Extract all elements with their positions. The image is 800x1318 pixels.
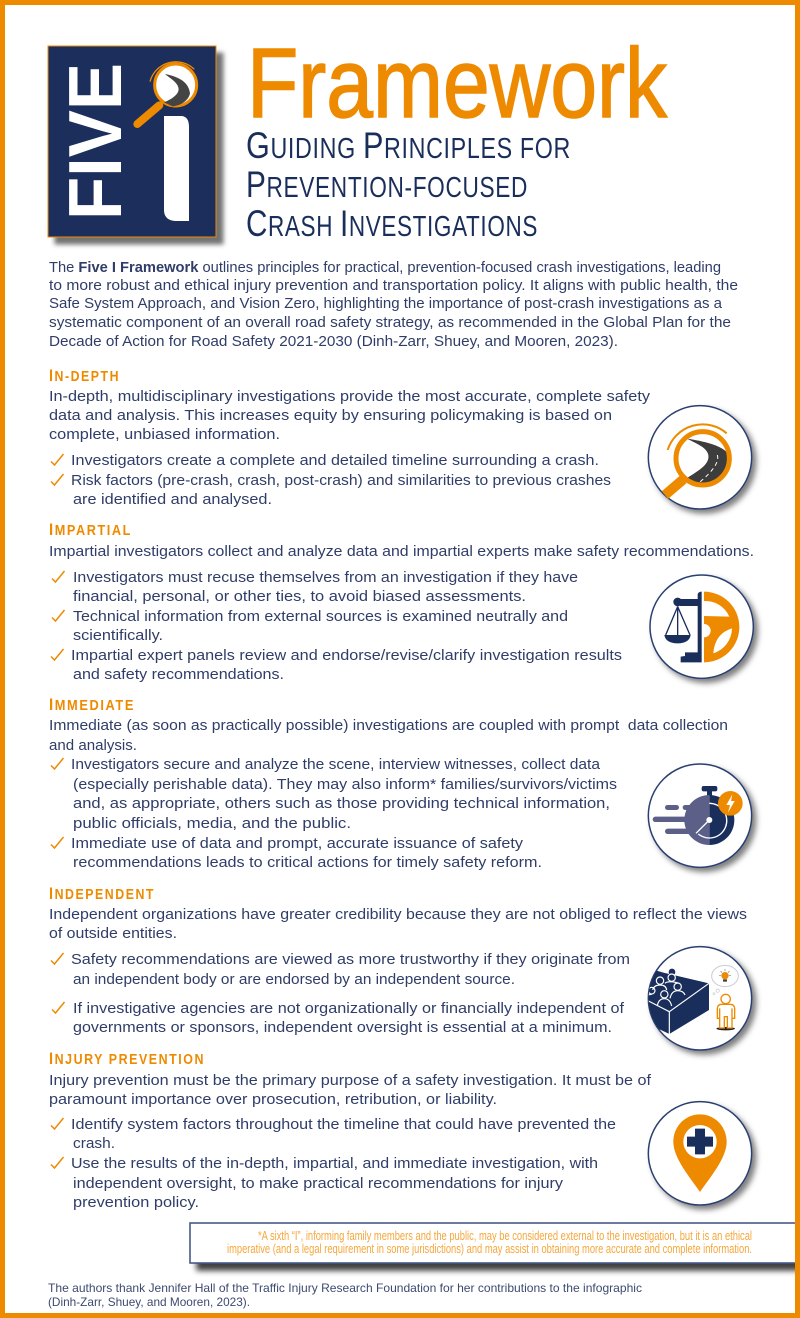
Independent description <box>49 907 747 942</box>
Impartial checklist: and safety recommendations. <box>73 667 284 683</box>
Immediate checklist <box>51 757 617 871</box>
Injury prevention checklist: Use the results of the in-depth, impartial, and immediate investigation, with <box>71 1156 598 1172</box>
Impartial checklist: Impartial expert panels review and endorse/revise/clarify investigation results <box>71 648 622 664</box>
intro text: to more robust and ethical injury prevention and transportation policy. It aligns with public health, the <box>49 278 738 294</box>
intro text: Safe System Approach, and Vision Zero, highlighting the importance of post-crash investigations as a <box>49 296 723 312</box>
icon: stopwatch with lightning bolt <box>648 764 752 867</box>
subtitle: CRASH INVESTIGATIONS <box>246 202 538 244</box>
intro text <box>49 260 738 350</box>
logo word FIVE: FIVE <box>53 63 137 220</box>
heading: Injury prevention: INJURY PREVENTION <box>49 1049 205 1068</box>
acknowledgements: The authors thank Jennifer Hall of the Traffic Injury Research Foundation for her contributions to the infographic <box>48 1281 642 1295</box>
Independent checklist: governments or sponsors, independent oversight is essential at a minimum. <box>73 1020 612 1036</box>
In-depth checklist: Risk factors (pre-crash, crash, post-crash) and similarities to previous crashes <box>71 473 611 489</box>
subtitle: GUIDING PRINCIPLES FOR <box>246 124 571 166</box>
Independent checklist: an independent body or are endorsed by an independent source. <box>73 972 515 988</box>
Independent checklist: If investigative agencies are not organizationally or financially independent of <box>73 1001 625 1017</box>
Immediate checklist: (especially perishable data). They may also inform* families/survivors/victims <box>73 777 617 793</box>
Impartial checklist: scientifically. <box>73 628 163 644</box>
Injury prevention description: paramount importance over prosecution, retribution, or liability. <box>49 1092 497 1108</box>
Injury prevention checklist: crash. <box>73 1136 115 1152</box>
logo magnifying glass <box>137 62 197 124</box>
icon: scales and steering wheel <box>650 575 753 678</box>
intro text: Decade of Action for Road Safety 2021-2030 (Dinh-Zarr, Shuey, and Mooren, 2023). <box>49 334 618 350</box>
Impartial description: Impartial investigators collect and analyze data and impartial experts make safety recommendations. <box>49 544 754 560</box>
Immediate checklist: recommendations leads to critical actions for timely safety reform. <box>73 855 542 871</box>
icon: location pin with medical cross <box>648 1102 752 1205</box>
Immediate checklist: Investigators secure and analyze the scene, interview witnesses, collect data <box>71 757 601 773</box>
Impartial checklist: Investigators must recuse themselves from an investigation if they have <box>73 570 578 586</box>
Impartial checklist: Technical information from external sources is examined neutrally and <box>73 609 568 625</box>
Independent description: Independent organizations have greater credibility because they are not obliged to reflect the views <box>49 907 747 923</box>
Independent checklist: Safety recommendations are viewed as more trustworthy if they originate from <box>71 952 630 968</box>
icon: crowd in a box and independent person <box>643 947 752 1050</box>
Immediate description: and analysis. <box>49 738 137 754</box>
subtitle: PREVENTION-FOCUSED <box>246 163 528 205</box>
heading: In-depth: IN-DEPTH <box>49 366 120 385</box>
intro text: The Five I Framework outlines principles for practical, prevention-focused crash investigations, leading <box>49 260 721 276</box>
In-depth checklist <box>51 453 611 508</box>
acknowledgements <box>48 1281 642 1309</box>
heading: Immediate: IMMEDIATE <box>49 695 135 714</box>
panel: In-depth <box>49 366 752 509</box>
panel: Injury prevention <box>49 1049 752 1211</box>
Injury prevention description <box>49 1073 652 1108</box>
In-depth description: In-depth, multidisciplinary investigations provide the most accurate, complete safety <box>49 389 651 405</box>
panel: Independent <box>49 884 752 1050</box>
heading: Impartial: IMPARTIAL <box>49 520 132 539</box>
Immediate description <box>49 718 728 754</box>
Immediate checklist: Immediate use of data and prompt, accurate issuance of safety <box>71 836 524 852</box>
Impartial checklist <box>51 570 622 683</box>
Independent description: of outside entities. <box>49 926 177 942</box>
Injury prevention checklist: Identify system factors throughout the timeline that could have prevented the <box>71 1117 616 1133</box>
Injury prevention checklist <box>51 1117 616 1211</box>
panel: Immediate <box>49 695 752 871</box>
Immediate description: Immediate (as soon as practically possible) investigations are coupled with prompt data collection <box>49 718 728 734</box>
acknowledgements: (Dinh-Zarr, Shuey, and Mooren, 2023). <box>48 1295 250 1309</box>
In-depth checklist: Investigators create a complete and detailed timeline surrounding a crash. <box>71 453 599 469</box>
logo: Five I <box>48 46 216 237</box>
footnote callout <box>190 1223 800 1263</box>
In-depth description: complete, unbiased information. <box>49 427 280 443</box>
panel: Impartial <box>49 520 754 683</box>
Injury prevention checklist: independent oversight, to make practical recommendations for injury <box>73 1176 564 1192</box>
In-depth description <box>49 389 651 443</box>
In-depth checklist: are identified and analysed. <box>73 492 272 508</box>
Injury prevention checklist: prevention policy. <box>73 1195 199 1211</box>
intro text: systematic component of an overall road safety strategy, as recommended in the Global Plan for the <box>49 315 731 331</box>
subtitle <box>246 124 571 244</box>
Injury prevention description: Injury prevention must be the primary purpose of a safety investigation. It must be of <box>49 1073 652 1089</box>
In-depth description: data and analysis. This increases equity by ensuring policymaking is based on <box>49 408 612 424</box>
Immediate checklist: public officials, media, and the public. <box>73 816 351 832</box>
Independent checklist <box>51 952 630 1036</box>
logo letter I as road <box>164 116 189 221</box>
heading: Independent: INDEPENDENT <box>49 884 155 903</box>
icon: magnifying glass over road <box>648 406 752 509</box>
title: Framework <box>247 28 668 138</box>
Immediate checklist: and, as appropriate, others such as those providing technical information, <box>73 796 610 812</box>
Impartial checklist: financial, personal, or other ties, to avoid biased assessments. <box>73 589 526 605</box>
